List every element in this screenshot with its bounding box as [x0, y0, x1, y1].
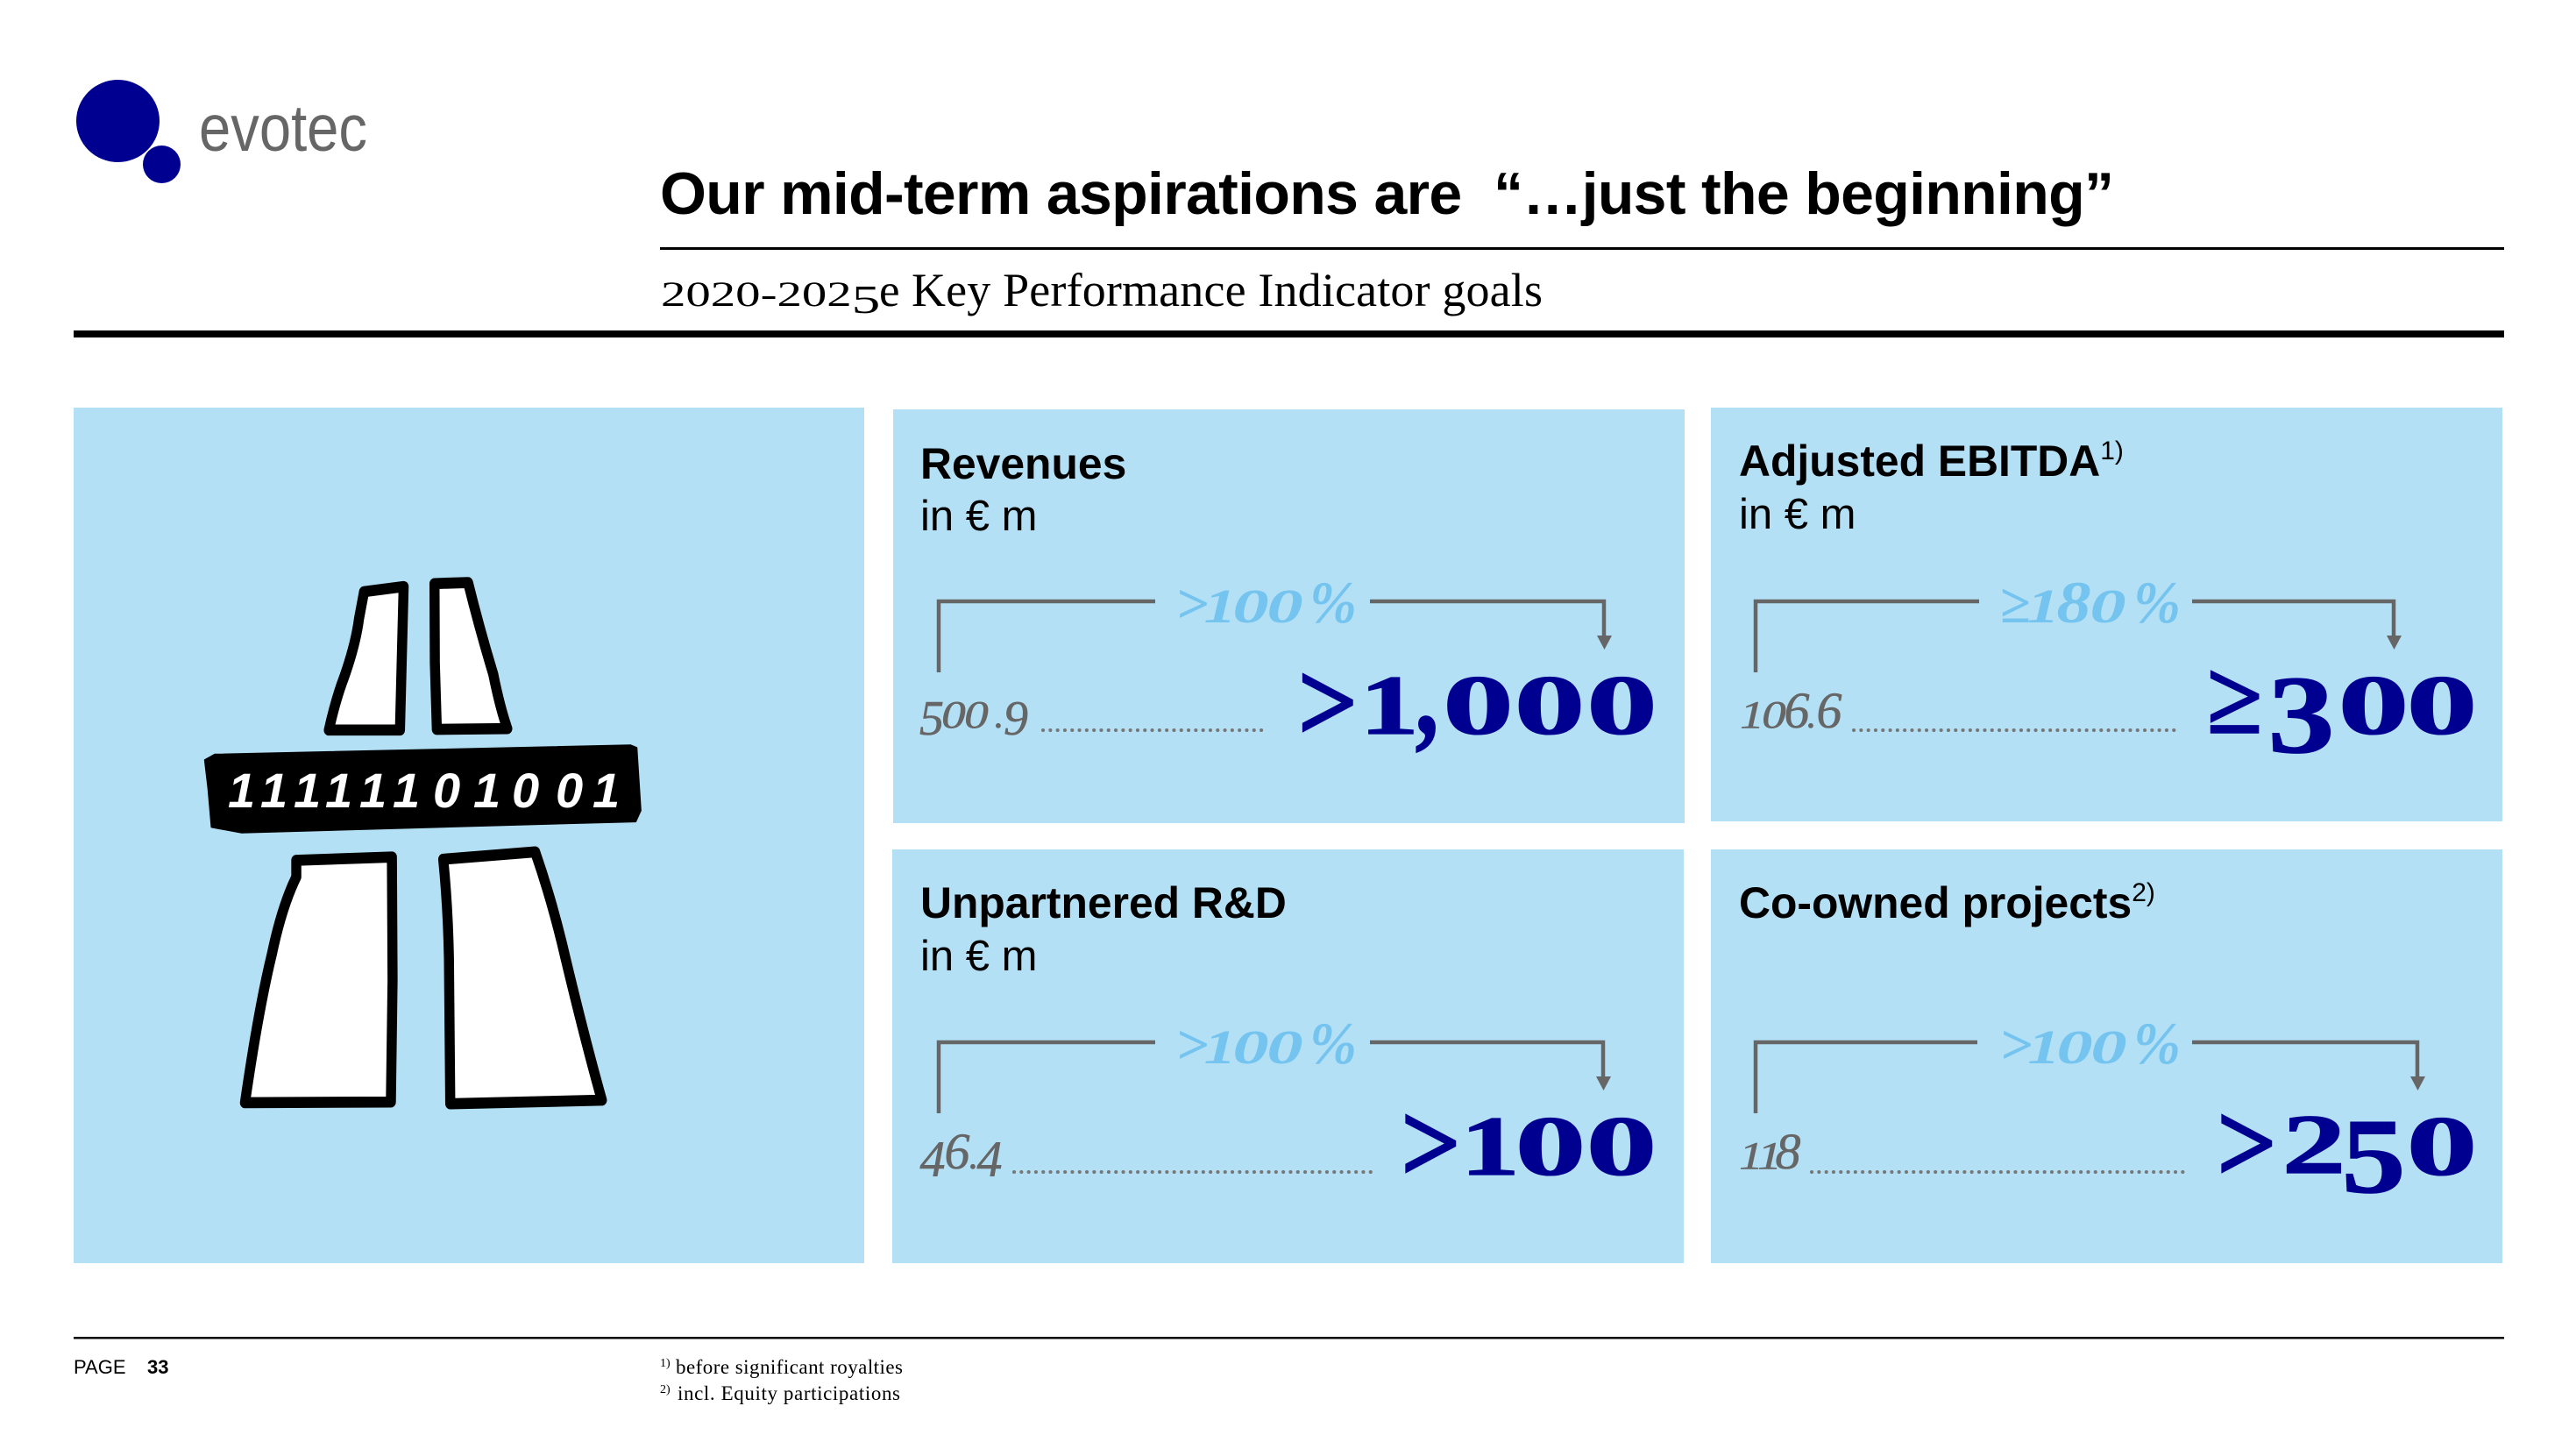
start value: 46.4	[920, 1123, 1003, 1188]
panel: unpartnered R&D	[892, 849, 1684, 1263]
heading: co-owned projects: 2)	[2132, 878, 2155, 907]
target value: >100: 0	[1515, 1099, 1586, 1193]
growth: >100%	[1175, 1012, 1357, 1076]
growth: >100%	[1175, 571, 1357, 636]
target value: >1,000: ,	[1416, 629, 1438, 760]
target value: >250: 0	[2407, 1099, 2477, 1193]
target value: >100: 1	[1460, 1099, 1520, 1193]
footnotes	[660, 1356, 903, 1404]
panel: revenues	[893, 409, 1685, 823]
growth: >100%: %	[1309, 1012, 1357, 1076]
heading: unpartnered R&D: Unpartnered R&D	[920, 878, 1287, 927]
growth: ≥180%: ≥	[2000, 573, 2030, 635]
target value: >1,000: 0	[1515, 658, 1585, 752]
panel: motorway illustration	[74, 408, 864, 1263]
growth: ≥180%: 8	[2056, 570, 2091, 636]
unit: in € m	[1739, 491, 1856, 538]
unit: in € m	[920, 933, 1037, 980]
target value: ≥300: ≥	[2207, 643, 2262, 756]
start value: 46.4: .	[969, 1134, 978, 1177]
heading: co-owned projects: Co-owned projects	[1739, 878, 2132, 927]
footnotes: before significant royalties	[676, 1356, 903, 1378]
start value: 118: 1	[1739, 1134, 1763, 1177]
growth: ≥180%: 0	[2090, 580, 2126, 634]
start value: 118	[1739, 1123, 1800, 1180]
growth: >100%: %	[2133, 1012, 2181, 1076]
start value: 500.9: 9	[1004, 692, 1028, 746]
start value: 118: 1	[1757, 1134, 1782, 1177]
start value: 106.6: 6	[1785, 682, 1809, 739]
logo: evotec	[76, 80, 367, 183]
target value: ≥300: 0	[2338, 658, 2409, 752]
subtitle: Key Performance Indicator goals	[912, 264, 1543, 316]
start value: 500.9	[919, 692, 1028, 746]
subtitle: 5	[852, 278, 880, 323]
arrow	[939, 1042, 1611, 1113]
page number	[74, 1356, 168, 1378]
growth: ≥180%: 1	[2026, 580, 2060, 634]
growth: >100%: %	[1309, 571, 1357, 636]
start value: 500.9: 5	[919, 692, 944, 746]
arrow	[939, 601, 1612, 672]
growth: >100%: 0	[2090, 1021, 2127, 1075]
growth: >100%: >	[1175, 1013, 1209, 1076]
growth: ≥180%	[2000, 570, 2181, 636]
target value: >250	[2217, 1081, 2477, 1216]
start value: 500.9: .	[994, 693, 1004, 736]
start value: 106.6	[1740, 682, 1842, 739]
target value: >100: 0	[1586, 1099, 1657, 1193]
panel: motorway illustration: 11111101001	[228, 763, 620, 818]
title: Our mid-term aspirations are “…just the beginning”	[660, 160, 2114, 227]
arrow	[1756, 1042, 2425, 1113]
target value: >100: >	[1401, 1081, 1461, 1207]
growth: ≥180%: %	[2133, 571, 2181, 636]
subtitle: e	[879, 266, 900, 316]
target value: >250: >	[2217, 1081, 2277, 1207]
target value: >250: 2	[2282, 1097, 2345, 1191]
growth: >100%: 1	[1203, 1021, 1237, 1075]
target value: >100	[1401, 1081, 1657, 1207]
start value: 500.9: 0	[941, 693, 966, 736]
start value: 500.9: 0	[964, 693, 989, 736]
growth: >100%: >	[1999, 1013, 2033, 1076]
growth: >100%: 0	[1267, 1021, 1303, 1075]
panel: co-owned projects	[1711, 849, 2502, 1263]
target value: >250: 5	[2341, 1097, 2406, 1216]
target value: ≥300: 0	[2407, 658, 2477, 752]
target value: >1,000: 0	[1586, 658, 1657, 752]
footnotes: 2)	[660, 1383, 671, 1396]
subtitle	[661, 264, 1543, 323]
arrow	[1756, 601, 2402, 672]
start value: 106.6: 6	[1816, 682, 1842, 739]
growth: >100%	[1999, 1012, 2181, 1076]
start value: 118: 8	[1776, 1123, 1800, 1180]
target value: >1,000	[1297, 629, 1657, 766]
footnotes: 1)	[660, 1357, 671, 1370]
unit: in € m	[920, 493, 1037, 540]
start value: 106.6: .	[1807, 693, 1816, 736]
start value: 46.4: 6	[945, 1123, 969, 1180]
footnotes: incl. Equity participations	[678, 1382, 900, 1404]
start value: 46.4: 4	[976, 1131, 1003, 1188]
target value: >1,000: 0	[1443, 658, 1514, 752]
page number: PAGE	[74, 1356, 126, 1378]
growth: >100%: 1	[2027, 1021, 2061, 1075]
start value: 106.6: 1	[1740, 693, 1764, 736]
icon: digital motorway	[205, 583, 641, 1104]
target value: ≥300: 3	[2267, 654, 2335, 777]
growth: >100%: 0	[2056, 1021, 2093, 1075]
growth: >100%: 0	[1232, 580, 1269, 634]
page number: 33	[147, 1356, 168, 1378]
start value: 106.6: 0	[1762, 693, 1786, 736]
panel: adjusted EBITDA	[1711, 408, 2502, 821]
growth: >100%: 0	[1232, 1021, 1269, 1075]
growth: >100%: >	[1175, 572, 1209, 635]
target value: >1,000: 1	[1359, 658, 1419, 752]
start value: 46.4: 4	[920, 1131, 945, 1188]
target value: ≥300	[2207, 643, 2477, 777]
heading: adjusted EBITDA: Adjusted EBITDA	[1739, 437, 2100, 486]
growth: >100%: 1	[1203, 580, 1237, 634]
logo: evotec: evotec	[199, 91, 367, 165]
subtitle: 2020-202	[661, 274, 852, 314]
target value: >1,000: >	[1297, 640, 1359, 766]
heading: revenues: Revenues	[920, 439, 1126, 488]
growth: >100%: 0	[1267, 580, 1303, 634]
heading: adjusted EBITDA: 1)	[2100, 437, 2124, 465]
